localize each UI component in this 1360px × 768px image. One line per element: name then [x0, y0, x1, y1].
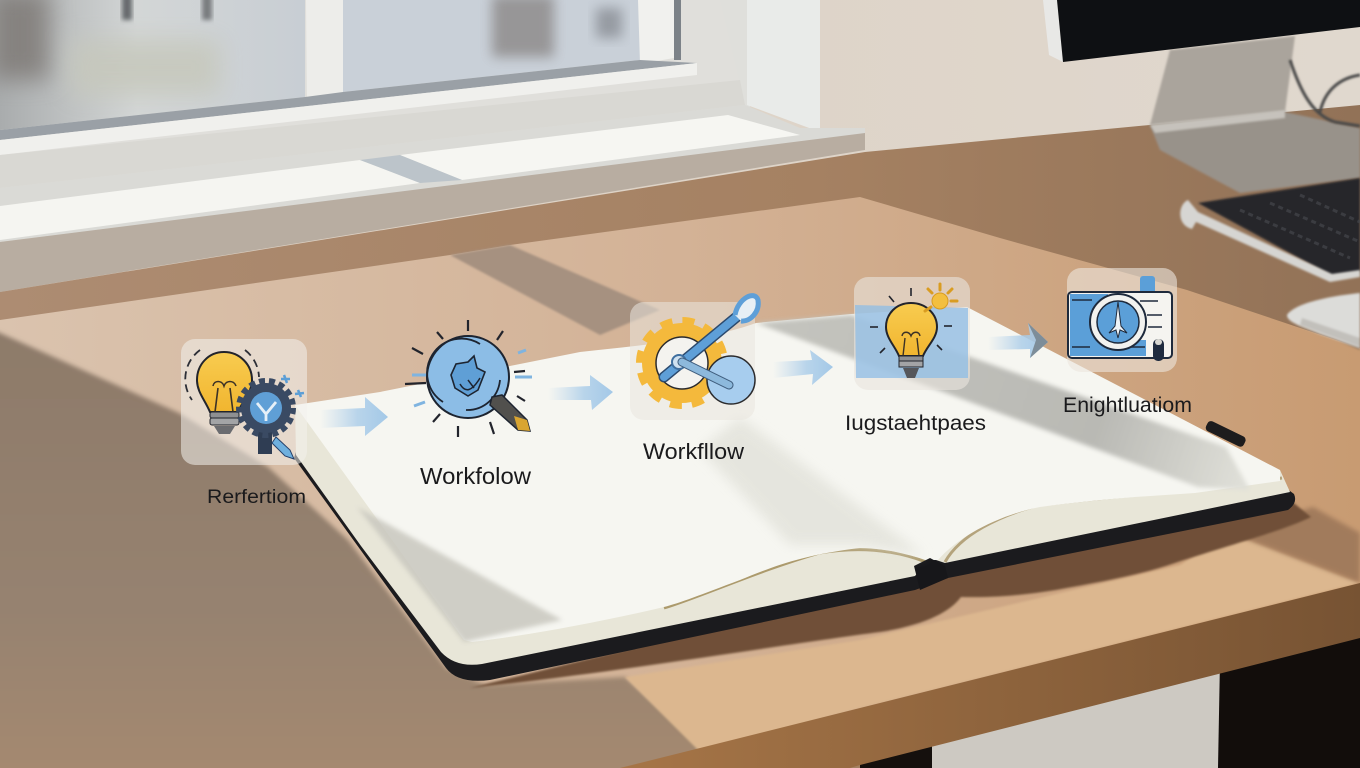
desk front edge [620, 583, 1360, 768]
spine dark bump [914, 558, 948, 590]
label: step 4: Iugstaehtpaes [845, 412, 986, 435]
sunlit wood [0, 197, 1360, 768]
shadow bands on pages [357, 315, 1250, 642]
label: step 3: Workfllow [643, 439, 744, 464]
monitor with stand [1043, 0, 1360, 193]
bulb [185, 350, 259, 434]
step 2 icon: magnifier and pen [405, 320, 532, 437]
window sill [0, 105, 865, 292]
step 3 icon tile: gear and wrench [630, 296, 758, 420]
window panes and frame [0, 0, 745, 190]
arrow 3 [773, 350, 833, 385]
arrow 4 [988, 323, 1048, 358]
keyboard [1180, 178, 1360, 282]
notebook cast shadow [470, 500, 1311, 688]
label: step 1: Rerfertiom [207, 486, 306, 508]
label: step 2: Workfolow [420, 463, 531, 489]
bright lower wood [625, 533, 1360, 752]
notebook cover [294, 440, 1295, 681]
mouse [1287, 293, 1360, 350]
step 4 icon tile: bulb with sun [854, 277, 970, 390]
left shadow on desk [0, 325, 720, 768]
step 1 icon tile: bulb and gear [181, 339, 307, 465]
background: wall and window [0, 0, 1360, 300]
label: step 5: Enightluatiom [1063, 394, 1192, 417]
notebook pages [295, 307, 1280, 642]
sun [925, 284, 957, 311]
page block edge [295, 405, 1290, 665]
arrow 1 [320, 397, 388, 436]
page tan rim [945, 478, 1282, 562]
arrow 2 [548, 375, 613, 410]
open notebook [294, 307, 1311, 688]
step 5 icon tile: document with compass [1067, 268, 1177, 372]
bookmark tab [1204, 420, 1247, 448]
gear [239, 381, 294, 459]
